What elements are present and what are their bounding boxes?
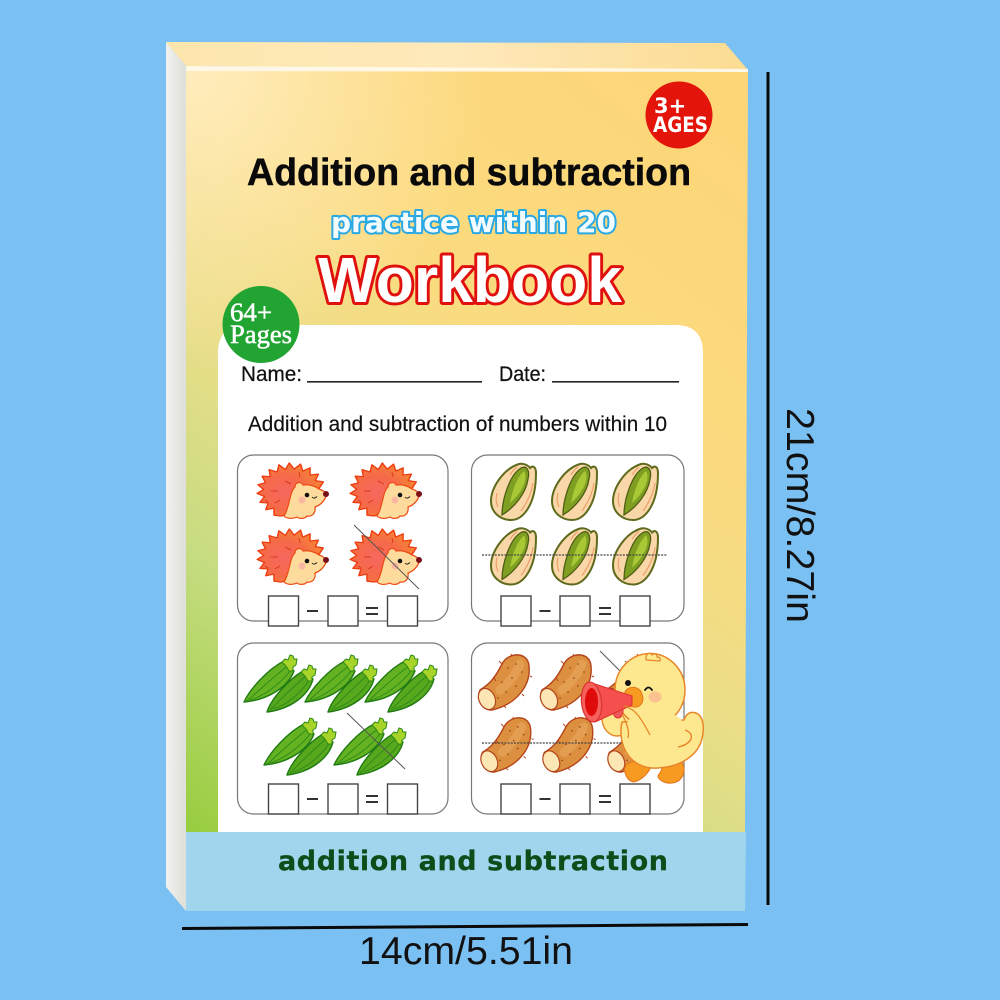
workbook 3D book cover (166, 42, 748, 911)
book top edge (166, 42, 748, 70)
age badge: AGES (653, 113, 708, 137)
answer boxes (501, 784, 650, 814)
root icons (475, 654, 661, 774)
subtitle: practice within 20 (331, 206, 616, 239)
age badge: 3+ (654, 94, 686, 118)
bottom band title: addition and subtraction (278, 846, 668, 877)
answer boxes (501, 596, 650, 626)
workbook heading: Workbook (318, 244, 622, 316)
exercise card: okra (238, 643, 448, 814)
white top edge (186, 66, 748, 72)
exercise card: pistachios (472, 455, 684, 626)
age badge (646, 82, 712, 148)
exercise card: roots (472, 643, 684, 814)
pages badge (222, 286, 300, 363)
name and date fields: Name: (241, 363, 302, 386)
answer boxes (268, 784, 418, 814)
title: Addition and subtraction (247, 152, 691, 194)
pages badge: 64+ (230, 298, 272, 327)
cover highlight (186, 70, 748, 420)
exercise card: hedgehogs (238, 455, 448, 626)
worksheet heading: Addition and subtraction of numbers within 10 (248, 412, 667, 436)
bottom band (186, 832, 746, 911)
name and date fields: Date: (499, 363, 546, 386)
okra icons (244, 655, 437, 775)
pistachio icons (491, 464, 658, 584)
book spine (166, 42, 186, 911)
height label: 21cm/8.27in (778, 408, 821, 623)
answer boxes (268, 596, 418, 626)
cover background (186, 70, 748, 833)
hedgehog icons (257, 463, 422, 584)
width dimension line (182, 924, 748, 928)
height dimension line (766, 72, 770, 905)
white worksheet panel (218, 325, 703, 832)
width label: 14cm/5.51in (359, 930, 573, 973)
name and date fields (241, 363, 679, 386)
pages badge: Pages (230, 320, 292, 349)
duck mascot with megaphone (579, 653, 703, 783)
